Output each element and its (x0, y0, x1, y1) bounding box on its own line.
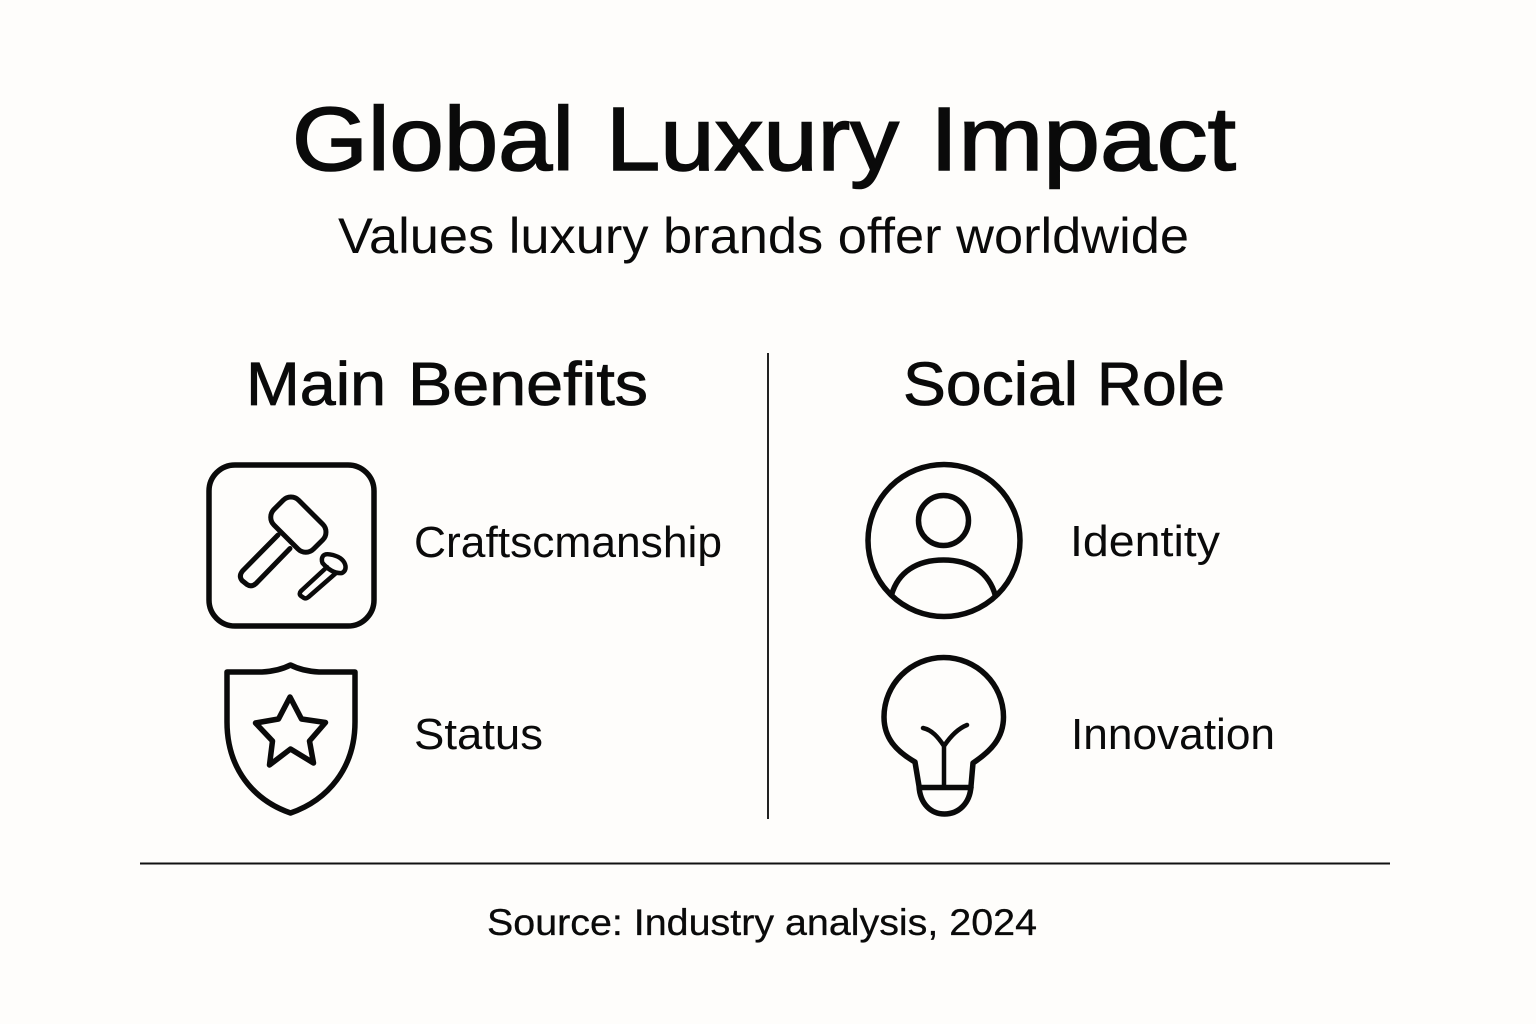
divider: horizontal (140, 862, 1390, 864)
panel: main benefits (209, 350, 722, 813)
icon: shield with star (227, 665, 355, 813)
label: innovation: Innovation (1071, 710, 1275, 759)
label: identity: Identity (1070, 517, 1220, 566)
title: Global (292, 90, 574, 190)
label: status: Status (414, 710, 543, 759)
divider: vertical (767, 353, 769, 819)
icon: light bulb (884, 658, 1004, 814)
subtitle: Values luxury brands offer worldwide (338, 208, 1189, 264)
heading: main benefits: Main (246, 350, 386, 418)
heading: main benefits (246, 350, 648, 418)
heading: social role: Social (903, 350, 1078, 418)
panel: social role (868, 350, 1275, 814)
source note: Source: Industry analysis, 2024 (487, 902, 1037, 943)
icon: person in circle (868, 464, 1020, 616)
title (292, 90, 1236, 190)
heading: social role (903, 350, 1225, 418)
icon: hammer and nail (209, 465, 374, 626)
heading: social role: Role (1097, 350, 1225, 418)
title: Impact (930, 90, 1236, 190)
label: craftsmanship: Craftscmanship (414, 518, 722, 567)
title: Luxury (606, 90, 899, 190)
heading: main benefits: Benefits (408, 350, 648, 418)
